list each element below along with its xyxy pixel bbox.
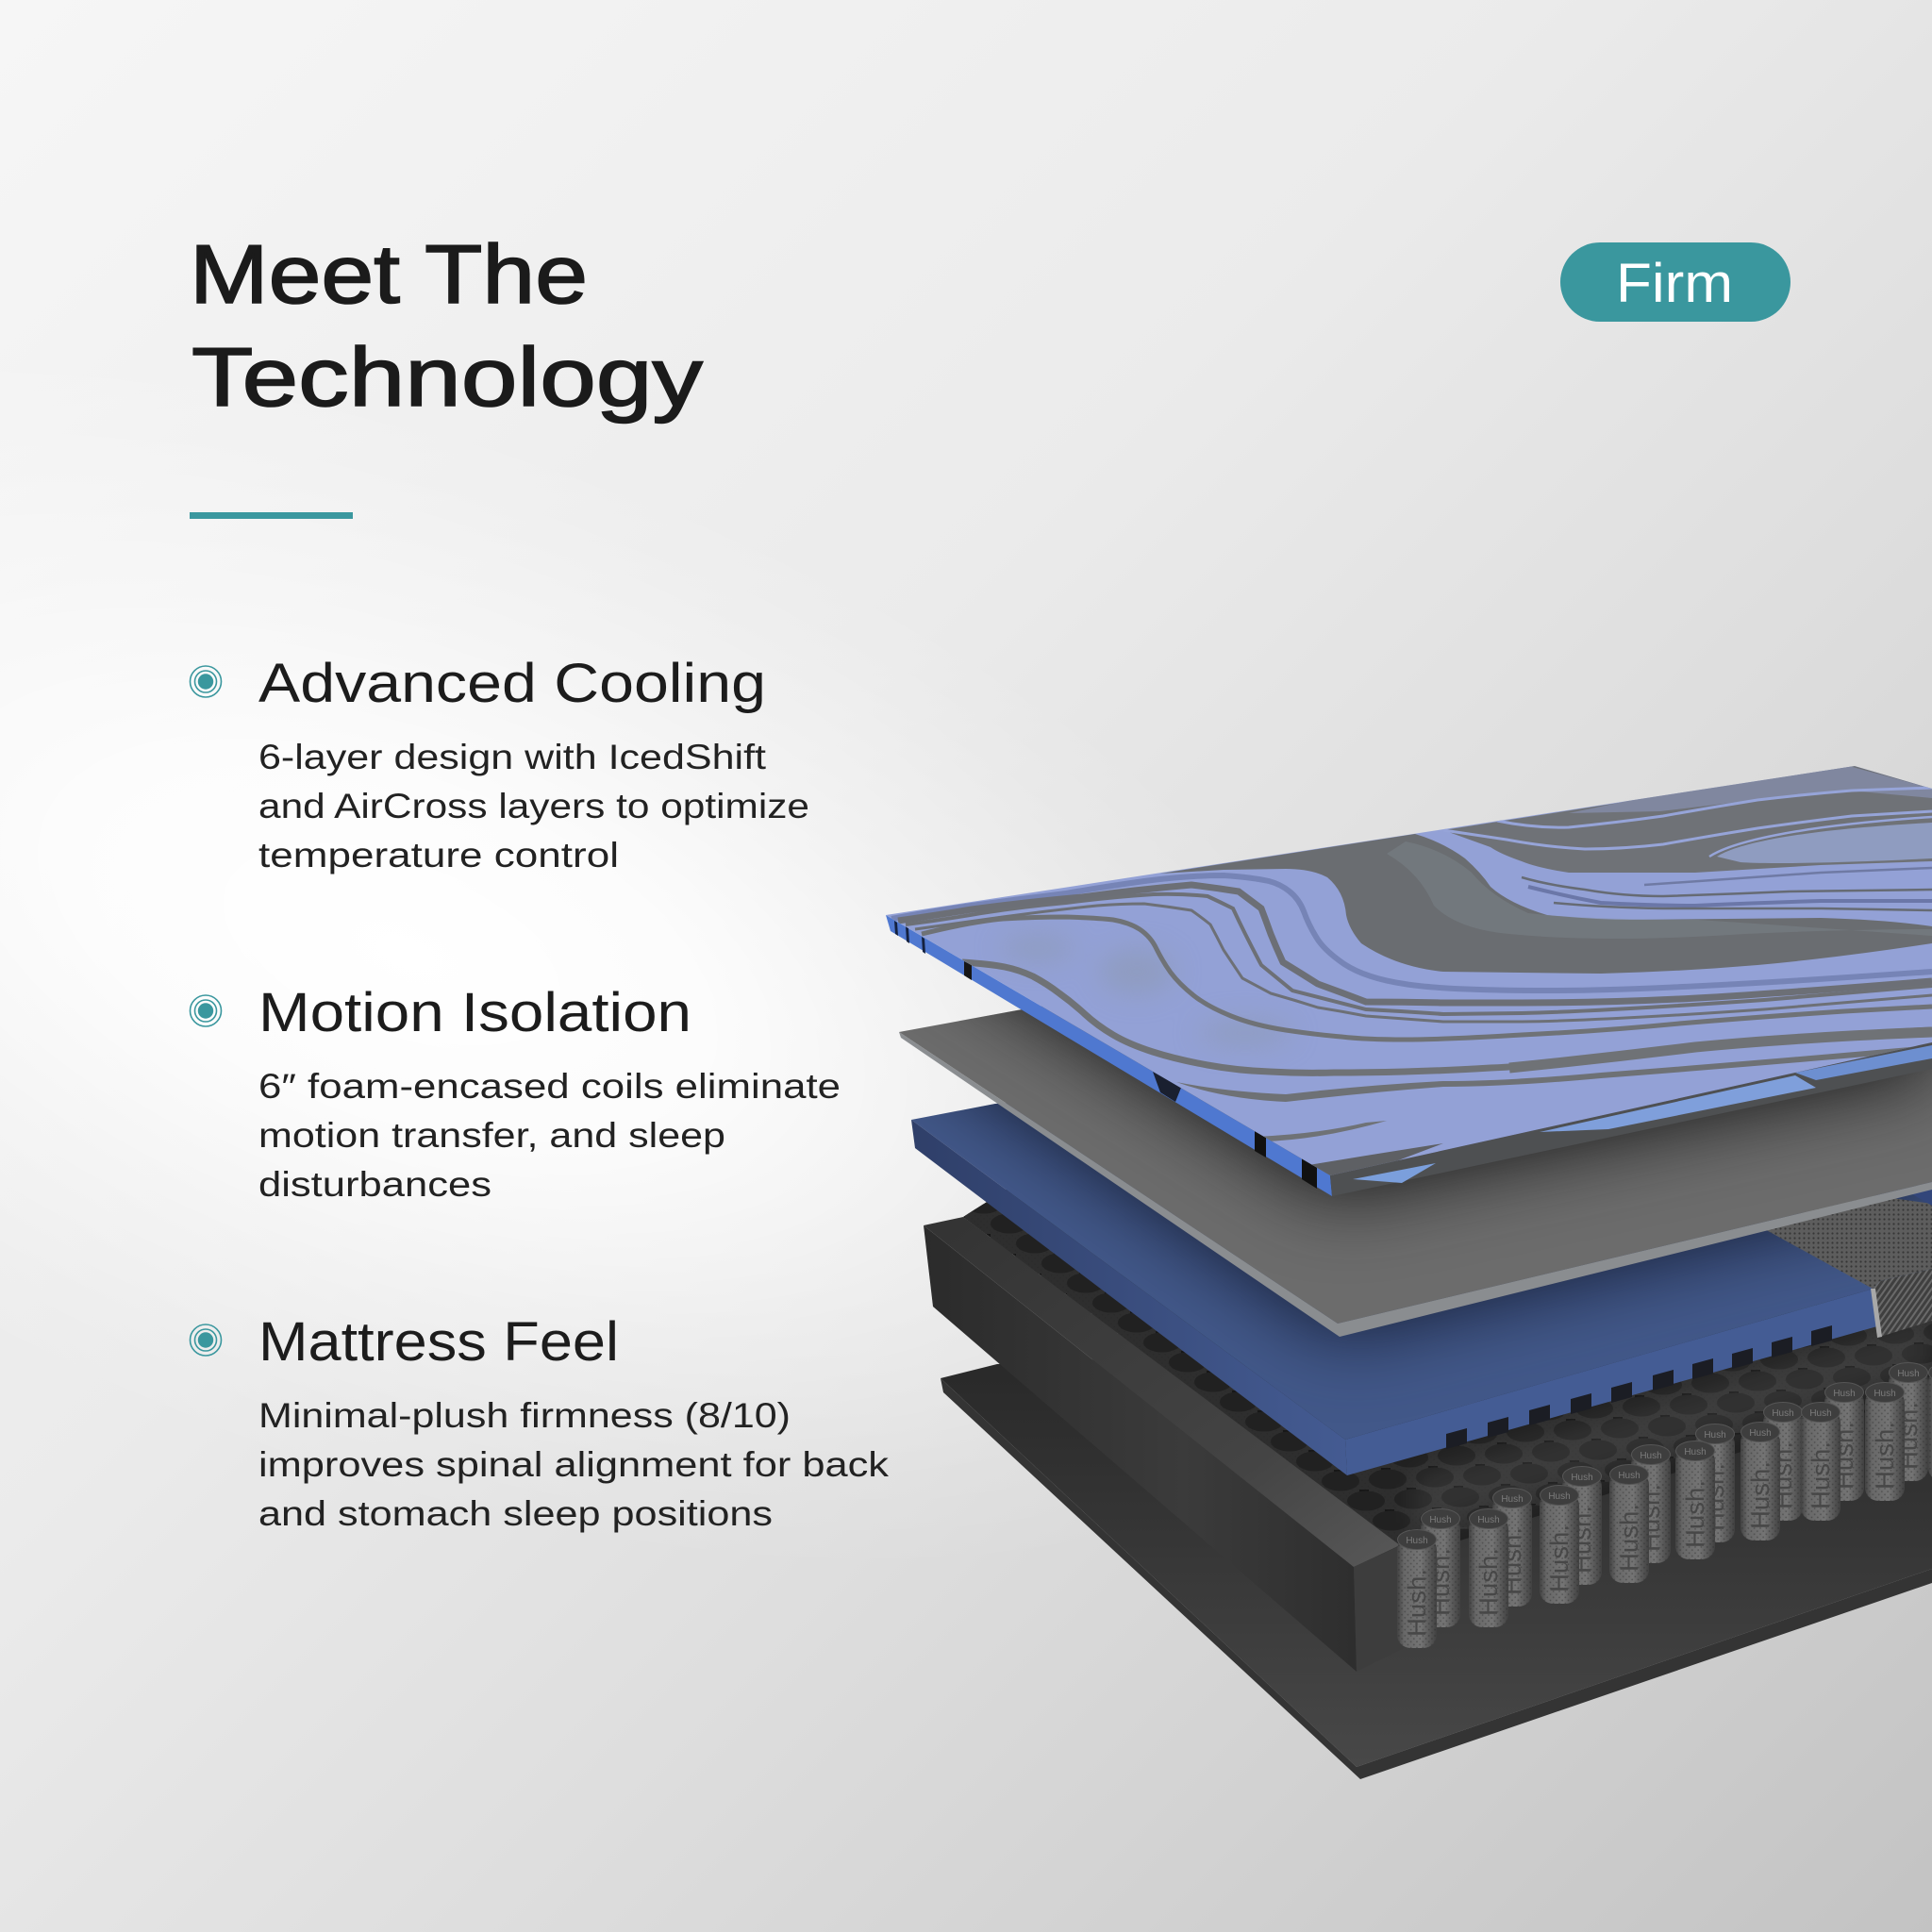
swirl: bottom streaks (1255, 1121, 1387, 1141)
feature: Advanced Cooling (191, 653, 809, 874)
badge: Firm (1560, 242, 1790, 322)
plate left side face (886, 915, 1332, 1196)
swirl: band S0 thick right end (1509, 1032, 1932, 1068)
description (258, 1396, 890, 1533)
plate top surface with marbled swirl (887, 766, 1932, 1175)
description: and stomach sleep positions (258, 1494, 773, 1533)
layer: grey foam sheet (899, 1006, 1932, 1337)
swirl: band T1 (915, 904, 1932, 1022)
title: Meet The (190, 227, 588, 321)
title underline rule (190, 512, 353, 519)
feature: Mattress Feel (191, 1311, 890, 1533)
swirl: upper right grey band (1443, 766, 1932, 873)
description: 6″ foam-encased coils eliminate (258, 1067, 841, 1106)
description: 6-layer design with IcedShift (258, 738, 767, 776)
icon: teal target bullet (191, 666, 221, 697)
heading: Advanced Cooling (258, 653, 766, 714)
swirl: front corner grey (1308, 1143, 1443, 1176)
swirl: lower grey wedge (1176, 1045, 1932, 1102)
title (190, 227, 703, 424)
swirl: band S0 (962, 962, 1932, 1073)
edge notches (1446, 1325, 1832, 1449)
illustration: exploded mattress layers (877, 755, 1932, 1779)
foam rail: long left side (924, 1217, 1406, 1672)
swirl: band T2 (906, 894, 1932, 1014)
icon: teal target bullet (191, 995, 221, 1026)
description: and AirCross layers to optimize (258, 787, 809, 825)
background glow band (0, 85, 1606, 1821)
icon: teal target bullet (191, 1324, 221, 1356)
swirl: soft mottling (1000, 935, 1292, 1046)
description: motion transfer, and sleep (258, 1116, 725, 1155)
swirl: band T3 (898, 885, 1932, 1003)
description (258, 1067, 841, 1204)
layer: base foam slab (941, 1321, 1932, 1779)
heading: Motion Isolation (258, 982, 691, 1043)
side reflections (894, 921, 1932, 1189)
layer: carbon fabric stripe (1761, 1182, 1932, 1338)
plate front side face (1330, 1042, 1932, 1196)
layer: swirled blue gel foam top (877, 755, 1932, 1208)
swirl: blob inner lighter veil (1387, 841, 1932, 939)
swirl: upper fine light stripes (1443, 788, 1932, 857)
description: temperature control (258, 836, 619, 874)
heading: Mattress Feel (258, 1311, 619, 1373)
pocket coils: second row (1421, 1362, 1928, 1627)
layer: navy foam with notched edge (911, 1103, 1932, 1475)
feature: Motion Isolation (191, 982, 841, 1204)
swirl: light lens (1717, 823, 1932, 863)
description: disturbances (258, 1165, 491, 1204)
layer: foam-encased coil bed (963, 1190, 1932, 1543)
description: improves spinal alignment for back (258, 1445, 890, 1484)
swirl: central grey blob (1160, 834, 1932, 974)
swirl: band T4 (891, 875, 1932, 991)
pocket coils: front row (1397, 1362, 1932, 1648)
description: Minimal-plush firmness (8/10) (258, 1396, 791, 1435)
coil tops grid (965, 1202, 1932, 1543)
title: Technology (192, 330, 703, 424)
description (258, 738, 809, 874)
swirl: fine stripes in light band (1522, 868, 1932, 910)
swirl: band S1 (922, 917, 1932, 1040)
badge: Firm: Firm (1616, 253, 1733, 314)
